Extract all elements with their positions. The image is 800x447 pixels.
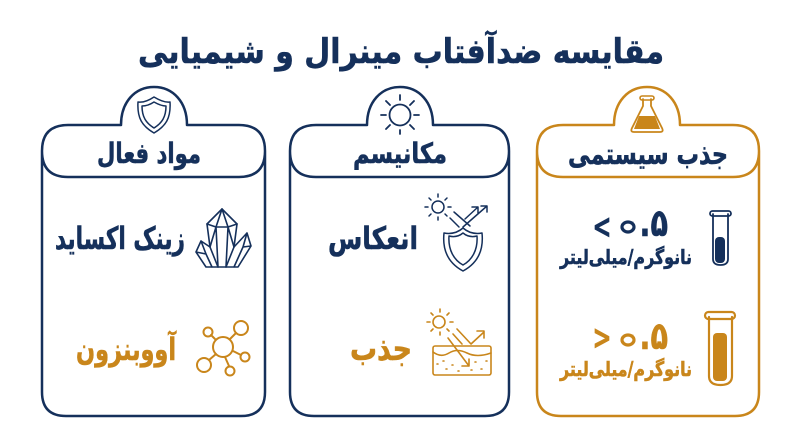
value: below 0.5 [592,201,668,247]
unit: nanogram per millilitre, gold: نانوگرم/میلی‌لیتر [559,357,692,381]
panel: active ingredients [42,87,265,416]
icon: high test tube [705,312,735,385]
title: مقایسه ضدآفتاب مینرال و شیمیایی [138,30,664,72]
icon: skin absorption [427,309,491,375]
panel outline: systemic absorption [537,87,759,416]
value: above 0.5 [592,314,668,358]
panel: systemic absorption [537,87,759,416]
icon: molecule [197,321,250,376]
icon: flask [631,96,663,132]
icon: crystals [196,209,251,267]
value: above 0.5: > [592,318,612,358]
value: below 0.5: < [592,207,612,247]
label: zinc oxide: زینک اکساید [55,221,185,257]
heading: active ingredients: مواد فعال [97,137,201,170]
panel: mechanism [290,87,509,416]
icon: shield [138,97,170,133]
unit: nanogram per millilitre, navy: نانوگرم/میلی‌لیتر [559,245,692,269]
label: avobenzone: آووبنزون [76,330,177,368]
panel outline: mechanism [290,87,509,416]
label: reflection: انعکاس [328,221,418,257]
heading: systemic absorption: جذب سیستمی [568,137,728,171]
label: absorption: جذب [350,329,412,368]
heading: mechanism: مکانیسم [353,137,447,170]
icon: shield reflecting sun [425,194,487,271]
value: below 0.5: ۰.۵ [622,201,668,245]
icon: low test tube [710,211,731,265]
icon: sun [381,95,419,134]
value: above 0.5: ۰.۵ [622,314,668,358]
panel outline: active ingredients [42,87,265,416]
